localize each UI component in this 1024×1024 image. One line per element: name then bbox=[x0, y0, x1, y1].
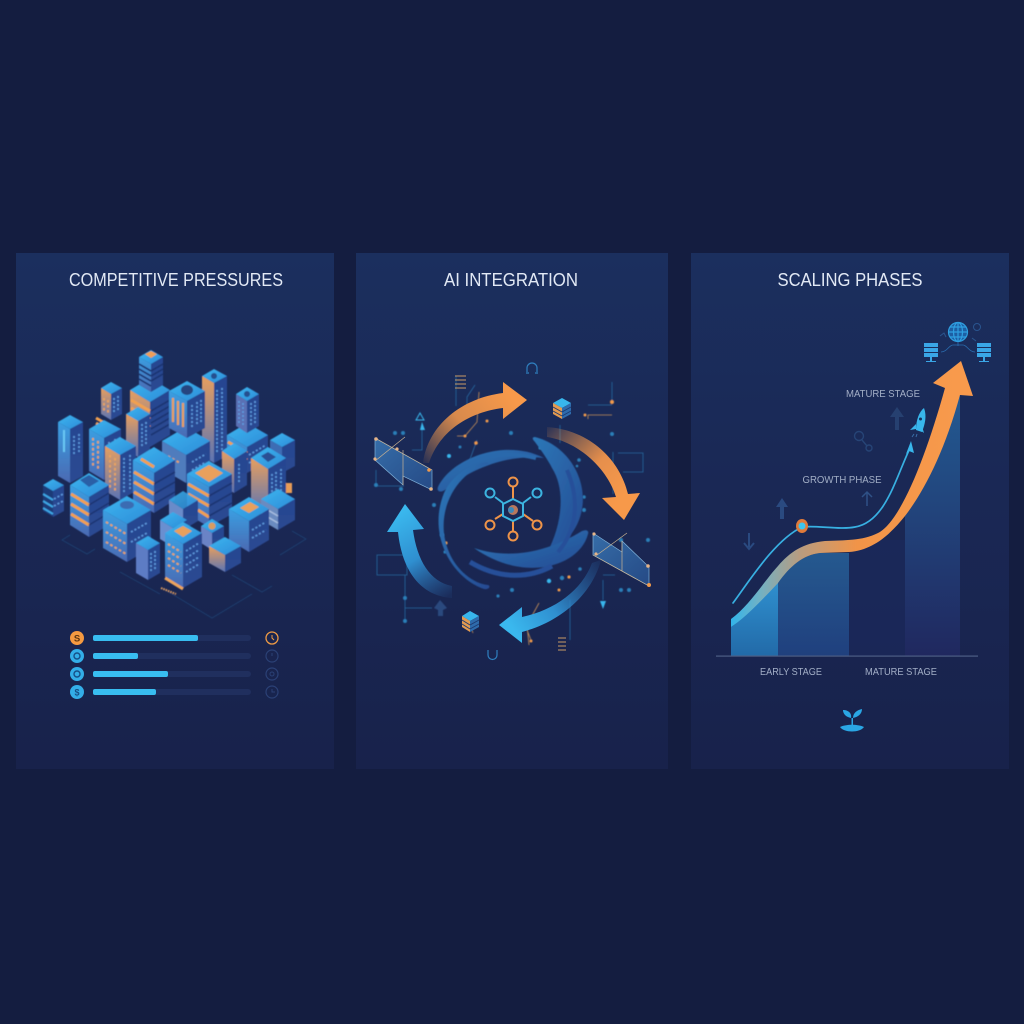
icon: outline arrow up bbox=[862, 492, 872, 506]
building: mid small bbox=[169, 491, 198, 530]
swirl: crescent ring bbox=[438, 437, 588, 589]
building: orange striped bbox=[133, 447, 175, 513]
building: right low bbox=[261, 483, 295, 530]
building: front left orange bands bbox=[70, 473, 109, 537]
heading: competitive pressures: COMPETITIVE PRESSURES bbox=[69, 270, 283, 290]
building: front window block bbox=[103, 496, 151, 562]
marker: inflection point bbox=[796, 519, 808, 533]
stage bar: mature bbox=[905, 395, 960, 656]
label: early stage: EARLY STAGE bbox=[760, 666, 822, 678]
building: tall rear bbox=[202, 369, 227, 463]
building: right block bbox=[251, 447, 286, 513]
icon: list bottom bbox=[558, 638, 566, 650]
stage bar: early left bbox=[731, 582, 778, 656]
line: blue trend bbox=[733, 448, 910, 603]
bar row 2 bbox=[70, 649, 278, 663]
arrow: right orange bbox=[547, 427, 640, 520]
icon: rocket bbox=[910, 408, 925, 437]
panel: ai integration bbox=[356, 253, 668, 769]
arrow: top orange bbox=[423, 382, 527, 463]
building: small front bbox=[160, 512, 187, 547]
icon: list top bbox=[455, 376, 466, 388]
building: center orange roof bbox=[187, 461, 232, 527]
bar row 3 bbox=[70, 667, 278, 681]
label: mature stage bottom: MATURE STAGE bbox=[865, 666, 937, 678]
building: wide tower bbox=[169, 381, 205, 438]
building: front tower bbox=[165, 522, 202, 589]
building: small cube bbox=[201, 519, 224, 550]
building: small stacked left bbox=[43, 479, 64, 517]
heading: ai integration: AI INTEGRATION bbox=[444, 270, 578, 290]
chart: growth curve bbox=[716, 322, 991, 678]
icon: server stack top bbox=[553, 398, 571, 419]
stage bar: early right bbox=[778, 553, 849, 656]
building: wide base bbox=[162, 427, 210, 483]
building: front low bbox=[209, 537, 241, 572]
building: back left bbox=[96, 382, 122, 431]
building: front small tower bbox=[136, 536, 160, 580]
building: left glass bbox=[58, 415, 83, 483]
illustration: isometric city bbox=[43, 350, 306, 618]
building: right front bbox=[229, 497, 269, 552]
bar row 4: $ bbox=[74, 688, 80, 698]
building: mid tall bbox=[105, 437, 136, 500]
icon: headset top bbox=[526, 363, 538, 373]
building: central tower base bbox=[130, 378, 170, 447]
stage bar: mid gap bbox=[849, 540, 905, 656]
icon: data panel left bbox=[373, 437, 433, 491]
building: stepped base bbox=[227, 423, 268, 473]
diagram: ai cycle bbox=[373, 363, 651, 660]
icon: globe with servers bbox=[924, 322, 991, 362]
baseline bbox=[716, 656, 978, 657]
bar row 1: S bbox=[74, 634, 80, 644]
building: right rear bbox=[270, 433, 295, 473]
arrow: bottom blue bbox=[499, 560, 601, 643]
building: mid left bbox=[89, 420, 121, 480]
circuit traces and dots bbox=[374, 376, 650, 645]
chart: pressure progress bars bbox=[70, 631, 278, 699]
label: growth phase: GROWTH PHASE bbox=[802, 474, 882, 486]
icon: data panel right bbox=[592, 532, 651, 587]
building: stepped tower bbox=[236, 387, 259, 433]
icon: central network hub bbox=[486, 478, 542, 540]
arrow: left blue bbox=[387, 504, 452, 598]
arrow: orange growth ribbon bbox=[731, 361, 973, 627]
bar row 4 bbox=[70, 685, 278, 699]
icon: faint arrow up left bbox=[776, 498, 788, 519]
icon: server stack bottom bbox=[462, 611, 479, 632]
icon: headset bottom bbox=[488, 650, 497, 660]
building: orange window block bbox=[126, 407, 150, 457]
bar row 1 bbox=[70, 631, 278, 645]
building: central tower top bbox=[139, 350, 163, 392]
label: mature stage top: MATURE STAGE bbox=[846, 388, 920, 400]
icon: sprout bbox=[840, 709, 864, 732]
icon: faint arrow down left bbox=[744, 533, 754, 549]
panel: competitive pressures bbox=[16, 253, 334, 769]
building: right orange face bbox=[222, 443, 247, 493]
arrowhead: trend line bbox=[906, 441, 914, 454]
icon: faint arrow up right bbox=[890, 407, 904, 430]
heading: scaling phases: SCALING PHASES bbox=[778, 270, 922, 290]
icon: magnifier bbox=[854, 432, 872, 451]
panel: scaling phases bbox=[691, 253, 1009, 769]
